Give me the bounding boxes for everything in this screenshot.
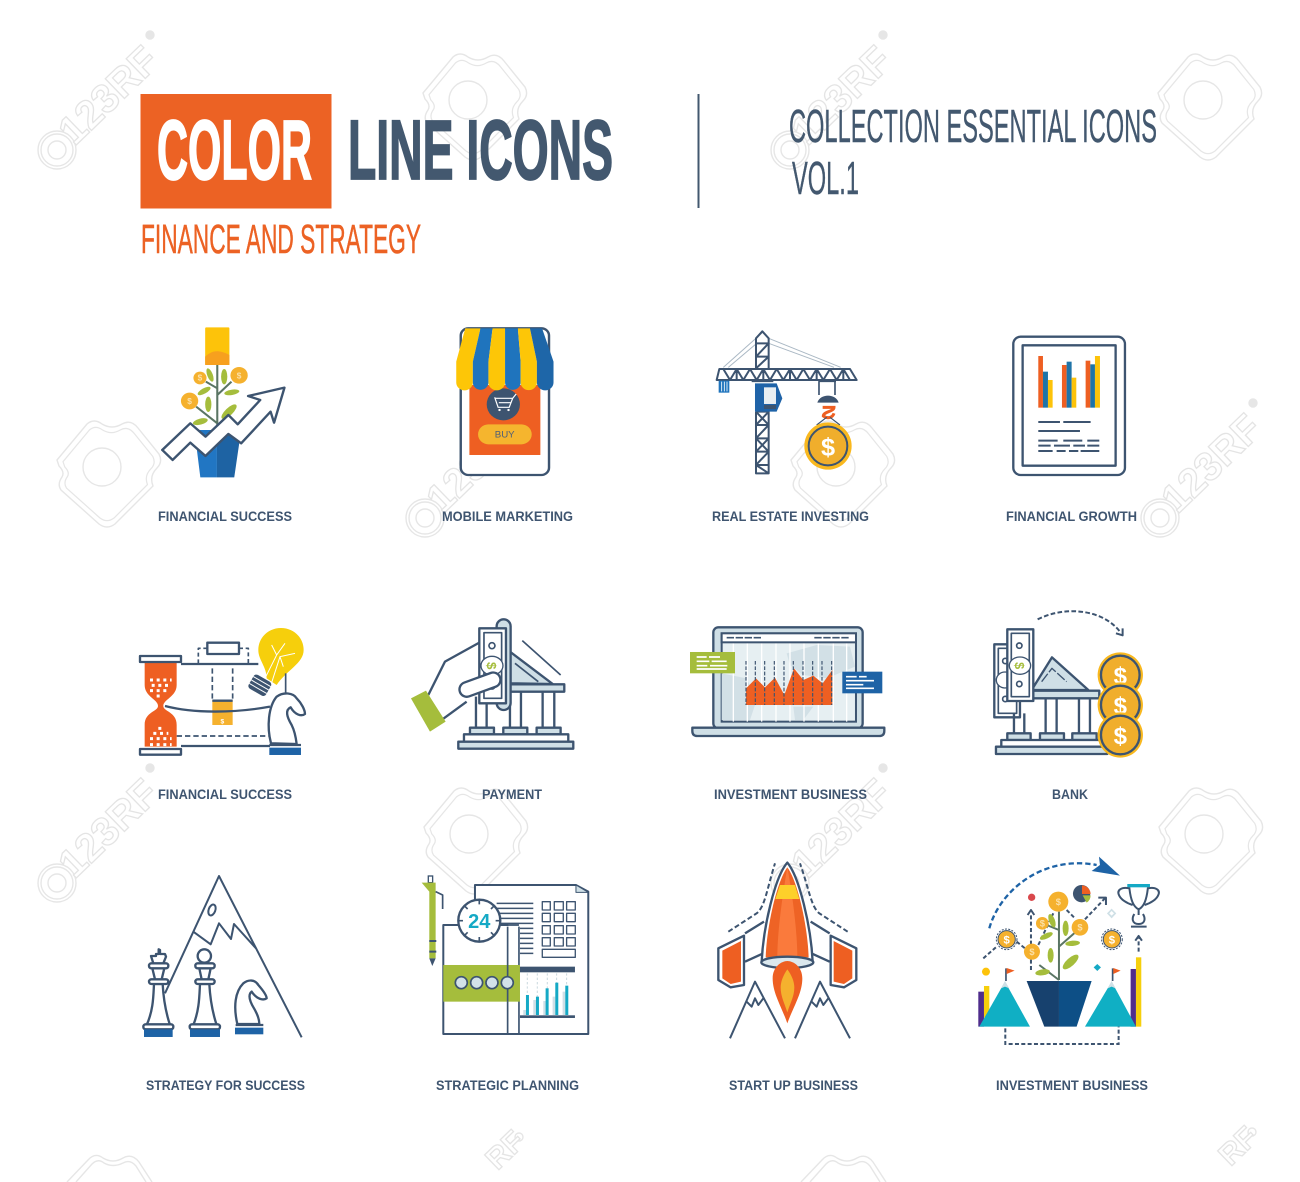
icon: investment growth scene bbox=[978, 857, 1159, 1044]
title block bbox=[140, 94, 613, 262]
side coins bbox=[996, 929, 1122, 950]
label: financial growth: FINANCIAL GROWTH bbox=[1006, 509, 1137, 524]
watermark layer: 123RF bbox=[50, 771, 167, 886]
calendar grid bbox=[542, 902, 575, 957]
laptop base bbox=[692, 728, 884, 736]
back banknote bbox=[994, 644, 1020, 717]
briefcase: $ bbox=[220, 718, 224, 725]
rocket body bbox=[761, 863, 813, 968]
tree bbox=[1024, 892, 1088, 980]
buy button bbox=[478, 424, 532, 444]
pie chart bbox=[1073, 885, 1091, 903]
subheading: finance and strategy: FINANCE AND STRATEGY bbox=[141, 216, 421, 262]
label: strategic planning: STRATEGIC PLANNING bbox=[436, 1078, 579, 1093]
coin stack bbox=[1098, 652, 1143, 758]
bar chart bbox=[1038, 356, 1100, 408]
knight piece bbox=[269, 693, 305, 755]
icon: strategic planning documents bbox=[422, 876, 588, 1034]
watermark layer: 123RF bbox=[783, 771, 900, 886]
cart badge bbox=[487, 388, 520, 420]
side coins: $ bbox=[1109, 935, 1116, 947]
dashed arrow bbox=[1038, 611, 1123, 635]
banknote bbox=[479, 619, 511, 710]
icon: mobile shop bbox=[456, 328, 554, 475]
dollar coin: $ bbox=[821, 433, 835, 461]
tree: $ bbox=[1077, 923, 1083, 933]
label: bank: BANK bbox=[1052, 787, 1088, 802]
right wing bbox=[811, 922, 856, 987]
text lines bbox=[1038, 422, 1099, 451]
mountain bbox=[165, 876, 302, 1037]
icon: hand paying into bank bbox=[411, 619, 573, 749]
leaves bbox=[192, 368, 240, 426]
label: real estate investing: REAL ESTATE INVESTING bbox=[712, 509, 869, 524]
banknote: $ bbox=[484, 662, 499, 670]
label: investment business row three: INVESTMENT BUSINESS bbox=[996, 1078, 1148, 1093]
pot bbox=[1027, 981, 1092, 1027]
mountains bbox=[730, 982, 850, 1038]
front banknote: $ bbox=[1012, 662, 1026, 669]
hourglass bbox=[140, 656, 181, 755]
window header bbox=[722, 633, 856, 642]
title badge: COLOR: COLOR bbox=[157, 103, 312, 197]
icon: plant growth with arrow bbox=[162, 327, 284, 477]
bank building bbox=[996, 657, 1107, 754]
icon: construction crane with coin bbox=[717, 331, 857, 473]
king bbox=[143, 949, 173, 1037]
pawn bbox=[190, 949, 220, 1037]
flame bbox=[773, 961, 802, 1023]
label: strategy for success: STRATEGY FOR SUCCESS bbox=[146, 1078, 305, 1093]
front banknote bbox=[1007, 629, 1033, 701]
left wing bbox=[718, 922, 764, 987]
speed dashes bbox=[728, 863, 848, 932]
coin symbols: $ bbox=[237, 371, 242, 380]
tree: $ bbox=[1040, 918, 1046, 928]
coin symbols: $ bbox=[187, 397, 192, 406]
gold coins bbox=[181, 367, 248, 409]
watermark layer: 123RF bbox=[783, 38, 900, 153]
green note bbox=[690, 652, 735, 673]
mountains bbox=[979, 968, 1136, 1027]
jib bbox=[717, 369, 857, 380]
icon: rocket bbox=[718, 863, 856, 1038]
chart in document bbox=[520, 967, 575, 1018]
watermark layer: 123RF bbox=[1153, 406, 1270, 521]
icon: laptop with chart bbox=[690, 627, 884, 736]
watermark layer: RF bbox=[479, 1125, 531, 1176]
collection heading: VOL.1 bbox=[792, 152, 859, 204]
label: mobile marketing: MOBILE MARKETING bbox=[442, 509, 573, 524]
document bbox=[443, 885, 588, 1034]
hook bbox=[817, 396, 840, 425]
dashed bracket bbox=[1005, 1027, 1119, 1044]
clock bbox=[458, 900, 500, 942]
side coins: $ bbox=[1003, 935, 1010, 947]
icon: tablet report bbox=[1013, 337, 1125, 475]
watermark layer: RF bbox=[1212, 1121, 1264, 1172]
coin symbols: $ bbox=[198, 374, 203, 383]
blue note bbox=[842, 672, 882, 693]
awning bbox=[456, 328, 554, 390]
watermark layer: 123RF bbox=[50, 38, 167, 153]
dashed arrows bbox=[983, 898, 1139, 970]
coin stack: $ bbox=[1114, 693, 1127, 720]
area chart bbox=[746, 668, 832, 705]
coin stack: $ bbox=[1114, 723, 1127, 750]
label: payment: PAYMENT bbox=[482, 787, 543, 802]
counterweight bbox=[719, 381, 729, 393]
icon: bank with coins bbox=[994, 611, 1143, 758]
clock: 24 bbox=[468, 911, 490, 933]
labels bbox=[146, 509, 1148, 1093]
dots and diamonds bbox=[982, 894, 1116, 976]
label: start up business: START UP BUSINESS bbox=[729, 1078, 858, 1093]
trophy bbox=[1118, 884, 1159, 927]
cabin bbox=[755, 383, 782, 412]
credit card bbox=[205, 327, 229, 365]
label: financial success: FINANCIAL SUCCESS bbox=[158, 509, 292, 524]
tree: $ bbox=[1029, 947, 1035, 957]
tree: $ bbox=[1056, 897, 1062, 907]
icon: hourglass, briefcase, bulb, knight bbox=[140, 628, 305, 755]
briefcase bbox=[165, 643, 270, 746]
blue arc with arrow bbox=[989, 857, 1120, 928]
bank building bbox=[458, 641, 573, 749]
green band bbox=[443, 965, 520, 1002]
rising arrow bbox=[162, 388, 284, 460]
pen bbox=[422, 876, 443, 966]
pot bbox=[194, 430, 241, 477]
light bulb bbox=[247, 628, 304, 697]
icon: chess pieces and mountain bbox=[143, 876, 302, 1037]
tie cables bbox=[723, 333, 841, 367]
label: investment business row two: INVESTMENT BUSINESS bbox=[714, 787, 867, 802]
coin stack: $ bbox=[1114, 663, 1127, 690]
watermark layer: 123RF bbox=[418, 406, 535, 521]
dollar coin bbox=[804, 422, 852, 470]
heading: LINE ICONS: LINE ICONS bbox=[348, 103, 613, 197]
map background bbox=[722, 645, 855, 720]
coin symbols bbox=[187, 371, 242, 406]
label: financial success row two: FINANCIAL SUCCESS bbox=[158, 787, 292, 802]
mast bbox=[756, 331, 769, 473]
hand and sleeve bbox=[411, 643, 503, 732]
title badge: COLOR bbox=[140, 94, 332, 208]
bars bbox=[978, 957, 1141, 1027]
knight bbox=[235, 981, 267, 1034]
buy button: BUY bbox=[495, 430, 515, 441]
collection heading bbox=[698, 94, 1157, 208]
